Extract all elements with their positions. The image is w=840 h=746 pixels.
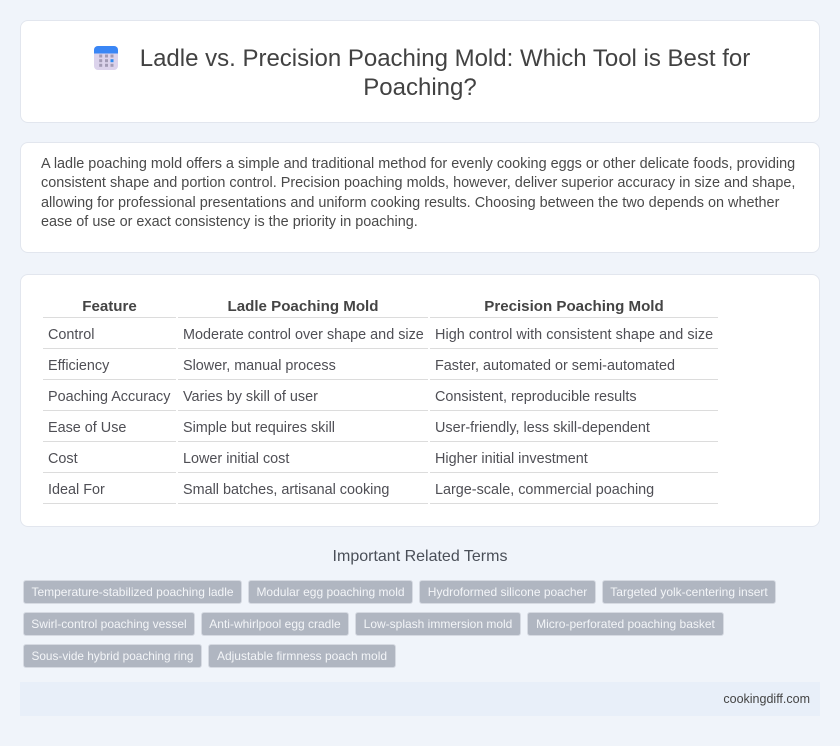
row: Efficiency bbox=[48, 358, 675, 374]
row: Cost: Lower initial cost bbox=[183, 451, 289, 467]
row: Ideal For bbox=[48, 482, 654, 498]
tag: modular mold: Modular egg poaching mold bbox=[256, 585, 405, 599]
icon: calendar bbox=[94, 46, 118, 70]
tag: modular mold bbox=[248, 580, 413, 604]
title line 1: Ladle vs. Precision Poaching Mold: Which Tool is Best for bbox=[140, 45, 750, 72]
row: Poaching Accuracy: Consistent, reproducible results bbox=[435, 389, 637, 405]
description line 4: ease of use or exact consistency is the priority in poaching. bbox=[41, 214, 418, 230]
row: Efficiency: Slower, manual process bbox=[183, 358, 336, 374]
row: Control: Moderate control over shape and size bbox=[183, 327, 424, 343]
row: Ease of Use: Ease of Use bbox=[48, 420, 126, 436]
tag: sous-vide ring bbox=[23, 644, 202, 668]
panel: title card bbox=[20, 20, 820, 123]
row: Ease of Use: Simple but requires skill bbox=[183, 420, 335, 436]
footer credit: cookingdiff.com bbox=[723, 692, 810, 706]
tag: temperature-stabilized ladle bbox=[23, 580, 242, 604]
description line 3: allowing for professional presentations and uniform cooking results. Choosing between the two depends on whether bbox=[41, 195, 779, 211]
tag: anti-whirlpool cradle bbox=[201, 612, 349, 636]
row: Ideal For: Large-scale, commercial poaching bbox=[435, 482, 654, 498]
row: Poaching Accuracy bbox=[48, 389, 637, 405]
tag: low-splash mold bbox=[355, 612, 521, 636]
tag: hydroformed poacher bbox=[419, 580, 596, 604]
row: Control: Control bbox=[48, 327, 94, 343]
tag: temperature-stabilized ladle: Temperature-stabilized poaching ladle bbox=[31, 585, 234, 599]
row: Control: High control with consistent shape and size bbox=[435, 327, 713, 343]
row: Ideal For: Ideal For bbox=[48, 482, 105, 498]
row: Cost: Cost bbox=[48, 451, 78, 467]
table header: Precision Poaching Mold: Precision Poaching Mold bbox=[484, 298, 664, 315]
tag: anti-whirlpool cradle: Anti-whirlpool egg cradle bbox=[209, 617, 341, 631]
row: Efficiency: Efficiency bbox=[48, 358, 109, 374]
row: Poaching Accuracy: Varies by skill of user bbox=[183, 389, 318, 405]
tag: hydroformed poacher: Hydroformed silicone poacher bbox=[428, 585, 587, 599]
row: Ease of Use bbox=[48, 420, 650, 436]
tag: yolk-centering insert bbox=[602, 580, 776, 604]
panel: description bbox=[20, 142, 820, 253]
tag: yolk-centering insert: Targeted yolk-centering insert bbox=[610, 585, 768, 599]
tag: micro-perforated basket: Micro-perforated poaching basket bbox=[536, 617, 715, 631]
panel: comparison table bbox=[20, 274, 820, 527]
footer bar bbox=[20, 682, 820, 716]
tag: low-splash mold: Low-splash immersion mold bbox=[364, 617, 512, 631]
heading: related terms: Important Related Terms bbox=[333, 548, 507, 565]
tag: adjustable mold bbox=[208, 644, 396, 668]
table header: Ladle Poaching Mold: Ladle Poaching Mold bbox=[228, 298, 378, 315]
description line 1: A ladle poaching mold offers a simple and traditional method for evenly cooking eggs or other delicate foods, providing bbox=[41, 156, 795, 172]
tag: swirl-control vessel bbox=[23, 612, 195, 636]
table header: Feature: Feature bbox=[82, 298, 137, 315]
row: Cost bbox=[48, 451, 588, 467]
row: Ease of Use: User-friendly, less skill-dependent bbox=[435, 420, 650, 436]
description line 2: consistent shape and portion control. Precision poaching molds, however, deliver superior accuracy in size and shape, bbox=[41, 175, 795, 191]
row: Control bbox=[48, 327, 713, 343]
title line 2: Poaching? bbox=[363, 74, 477, 101]
tag: sous-vide ring: Sous-vide hybrid poaching ring bbox=[32, 649, 193, 663]
row: Poaching Accuracy: Poaching Accuracy bbox=[48, 389, 170, 405]
row: Efficiency: Faster, automated or semi-automated bbox=[435, 358, 675, 374]
row: Cost: Higher initial investment bbox=[435, 451, 588, 467]
tag: swirl-control vessel: Swirl-control poaching vessel bbox=[31, 617, 187, 631]
tag: adjustable mold: Adjustable firmness poach mold bbox=[217, 649, 387, 663]
tag: micro-perforated basket bbox=[527, 612, 724, 636]
row: Ideal For: Small batches, artisanal cooking bbox=[183, 482, 389, 498]
